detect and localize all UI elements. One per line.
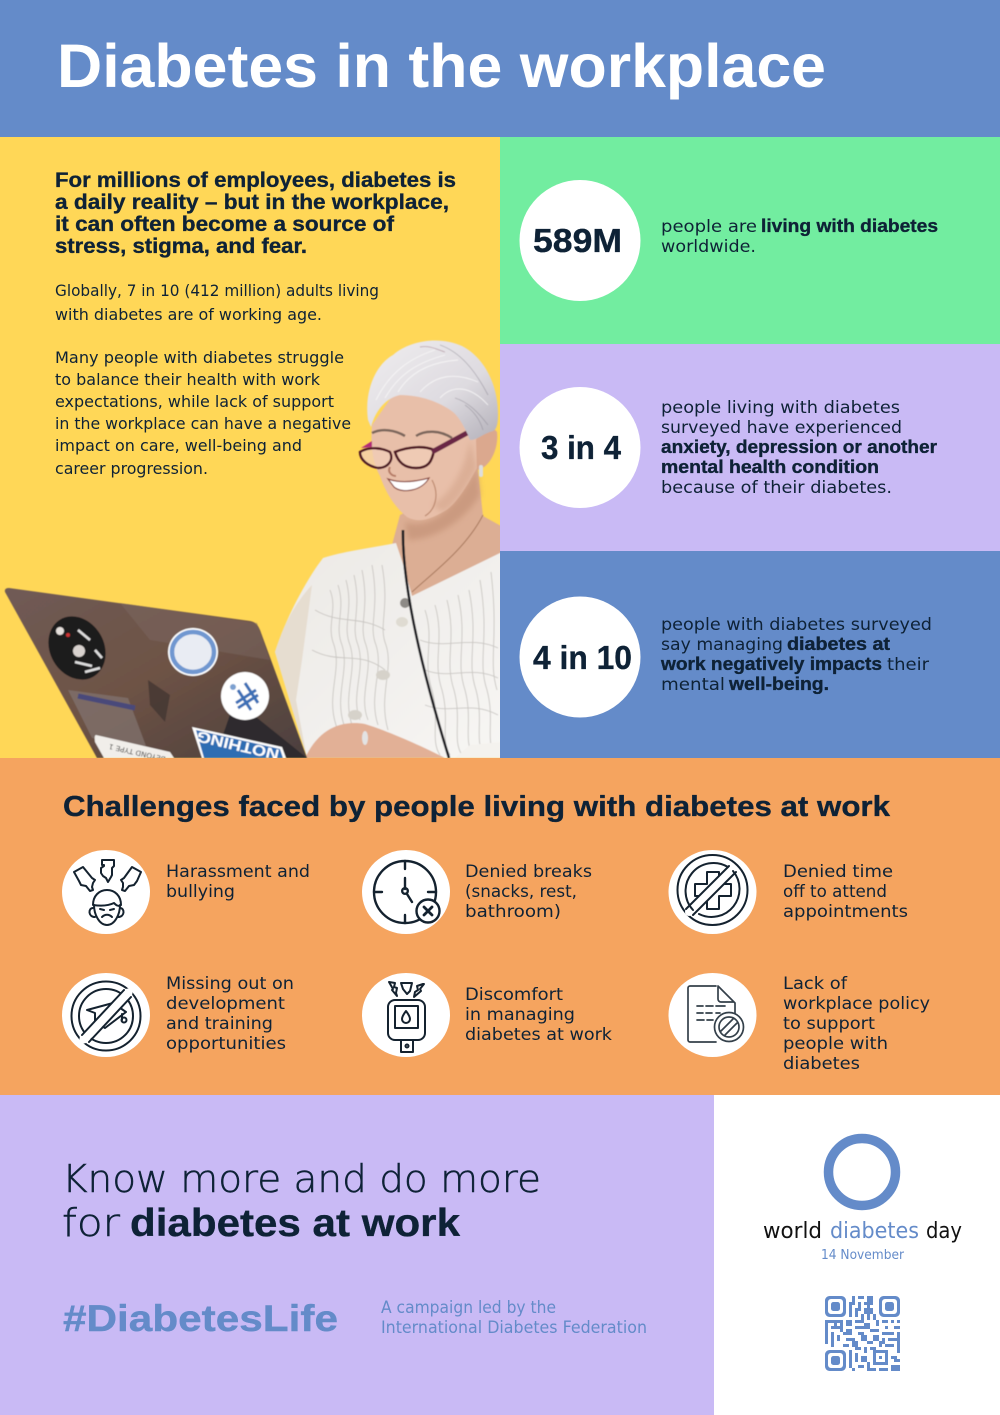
stat text: well-being: diabetes at [787,634,890,654]
challenge text: discomfort [465,985,612,1045]
challenge text: harassment [166,862,310,902]
stat text: well-being: work negatively impacts [660,654,882,674]
challenge text: denied time off: appointments [783,902,908,922]
stat text: mental health [661,398,937,498]
stat circle: 3 in 4: 3 in 4 [541,429,622,466]
challenge text: discomfort: in managing [465,1005,575,1025]
panel: statistic 3 in 4 [500,344,1000,551]
title: Diabetes in the workplace [57,32,826,100]
challenge text: denied breaks: bathroom) [465,902,561,922]
stat text: well-being [660,615,932,695]
challenges heading: Challenges faced by people living with diabetes at work [63,791,891,823]
photo: woman working on a laptop [5,340,501,763]
stat text: mental health: people living with diabetes [661,398,900,418]
intro text: struggles: career progression. [55,459,208,478]
challenge text: missing training: opportunities [166,1034,286,1054]
panel: header [0,0,1000,137]
hashtag: #DiabetesLife [63,1298,338,1339]
stat text: living with diabetes: people are [661,217,757,237]
stat text: well-being: mental [661,675,725,695]
icon: glucose meter [362,973,450,1057]
stat text: well-being: well-being. [728,674,829,694]
panel: introduction [0,137,501,763]
intro text: struggles: to balance their health with work [55,370,321,389]
stat text: well-being: people with diabetes surveyed [661,615,932,635]
intro text: struggles: expectations, while lack of support [55,392,334,411]
intro text: struggles: impact on care, well-being and [55,436,302,455]
stat text: mental health: surveyed have experienced [661,418,902,438]
intro text: struggles: Many people with diabetes struggle [55,348,344,367]
logo wordmark: diabetes [830,1219,919,1244]
challenge text: harassment: Harassment and [166,862,310,882]
challenge text: harassment: bullying [166,882,235,902]
panel: call to action [0,1095,714,1415]
challenge text: no policy: Lack of [783,974,848,994]
intro text: working age: Globally, 7 in 10 (412 million) adults living [55,281,379,300]
stat text: mental health: because of their diabetes. [661,478,892,498]
panel: world diabetes day [714,1095,1000,1415]
stat circle: 4 in 10: 4 in 10 [533,639,632,676]
stat text: mental health: mental health condition [661,457,879,477]
logo wordmark: day [926,1219,962,1244]
campaign credit: A campaign led by the [381,1298,556,1318]
challenge text: missing training: and training [166,1014,273,1034]
QR code [825,1296,900,1371]
icon: denied appointments [668,850,756,934]
challenge text: no policy: workplace policy [783,994,930,1014]
challenge text: discomfort: Discomfort [465,985,563,1005]
intro heading: stress, stigma, and fear. [55,234,307,258]
icon: no workplace policy [668,973,756,1057]
icon: denied breaks [362,850,450,934]
panel: statistic 589M [500,137,1000,344]
date: 14 November [821,1248,905,1263]
stat text: well-being: say managing [661,635,783,655]
intro text: working age: with diabetes are of working age. [55,305,322,324]
call to action heading: for [62,1201,120,1245]
panel: challenges [0,758,1000,1095]
challenge text: no policy [783,974,930,1074]
challenge text: missing training: development [166,994,285,1014]
intro text: working age [55,281,379,324]
challenge text: denied breaks: (snacks, rest, [465,882,577,902]
challenge text: denied time off [783,862,908,922]
intro heading: For millions of employees, diabetes is [55,168,456,192]
challenge text: discomfort: diabetes at work [465,1025,612,1045]
stat text: living with diabetes: worldwide. [661,237,756,257]
stat text: well-being: their [887,655,929,675]
campaign credit: International Diabetes Federation [381,1318,647,1338]
challenge text: denied breaks: Denied breaks [465,862,592,882]
intro heading: it can often become a source of [55,212,395,236]
challenge text: denied time off: Denied time [783,862,893,882]
intro text: struggles: in the workplace can have a negative [55,414,351,433]
challenge text: denied breaks [465,862,592,922]
intro text: struggles [55,348,351,478]
photo: woman working on a laptop: NOTHING [195,727,281,763]
stat circle: 3 in 4 [520,387,640,508]
logo wordmark [763,1219,962,1244]
logo wordmark: world [763,1219,822,1244]
call to action heading: Know more and do more [62,1157,541,1201]
challenge text: no policy: to support [783,1014,875,1034]
photo: woman working on a laptop: BEYOND TYPE 1 [108,742,166,763]
panel: statistic 4 in 10 [500,551,1000,758]
stat text: mental health: anxiety, depression or another [661,437,937,457]
call to action heading: diabetes at work [130,1202,460,1245]
logo: blue circle [828,1138,896,1206]
icon: harassment [62,850,150,934]
intro heading [55,168,456,258]
call to action heading [62,1157,541,1245]
stat circle: 589M [520,180,640,301]
challenge text: no policy: people with [783,1034,888,1054]
challenge text: missing training [166,974,294,1054]
challenge text: denied time off: off to attend [783,882,887,902]
challenge text: no policy: diabetes [783,1054,860,1074]
campaign credit [381,1298,647,1338]
stat text: living with diabetes [661,216,938,257]
intro heading: a daily reality – but in the workplace, [55,190,449,214]
stat circle: 4 in 10 [520,596,640,718]
challenge text: missing training: Missing out on [166,974,294,994]
stat text: living with diabetes: living with diabetes [761,216,938,236]
icon: missing training [62,973,150,1057]
stat circle: 589M: 589M [533,222,622,259]
